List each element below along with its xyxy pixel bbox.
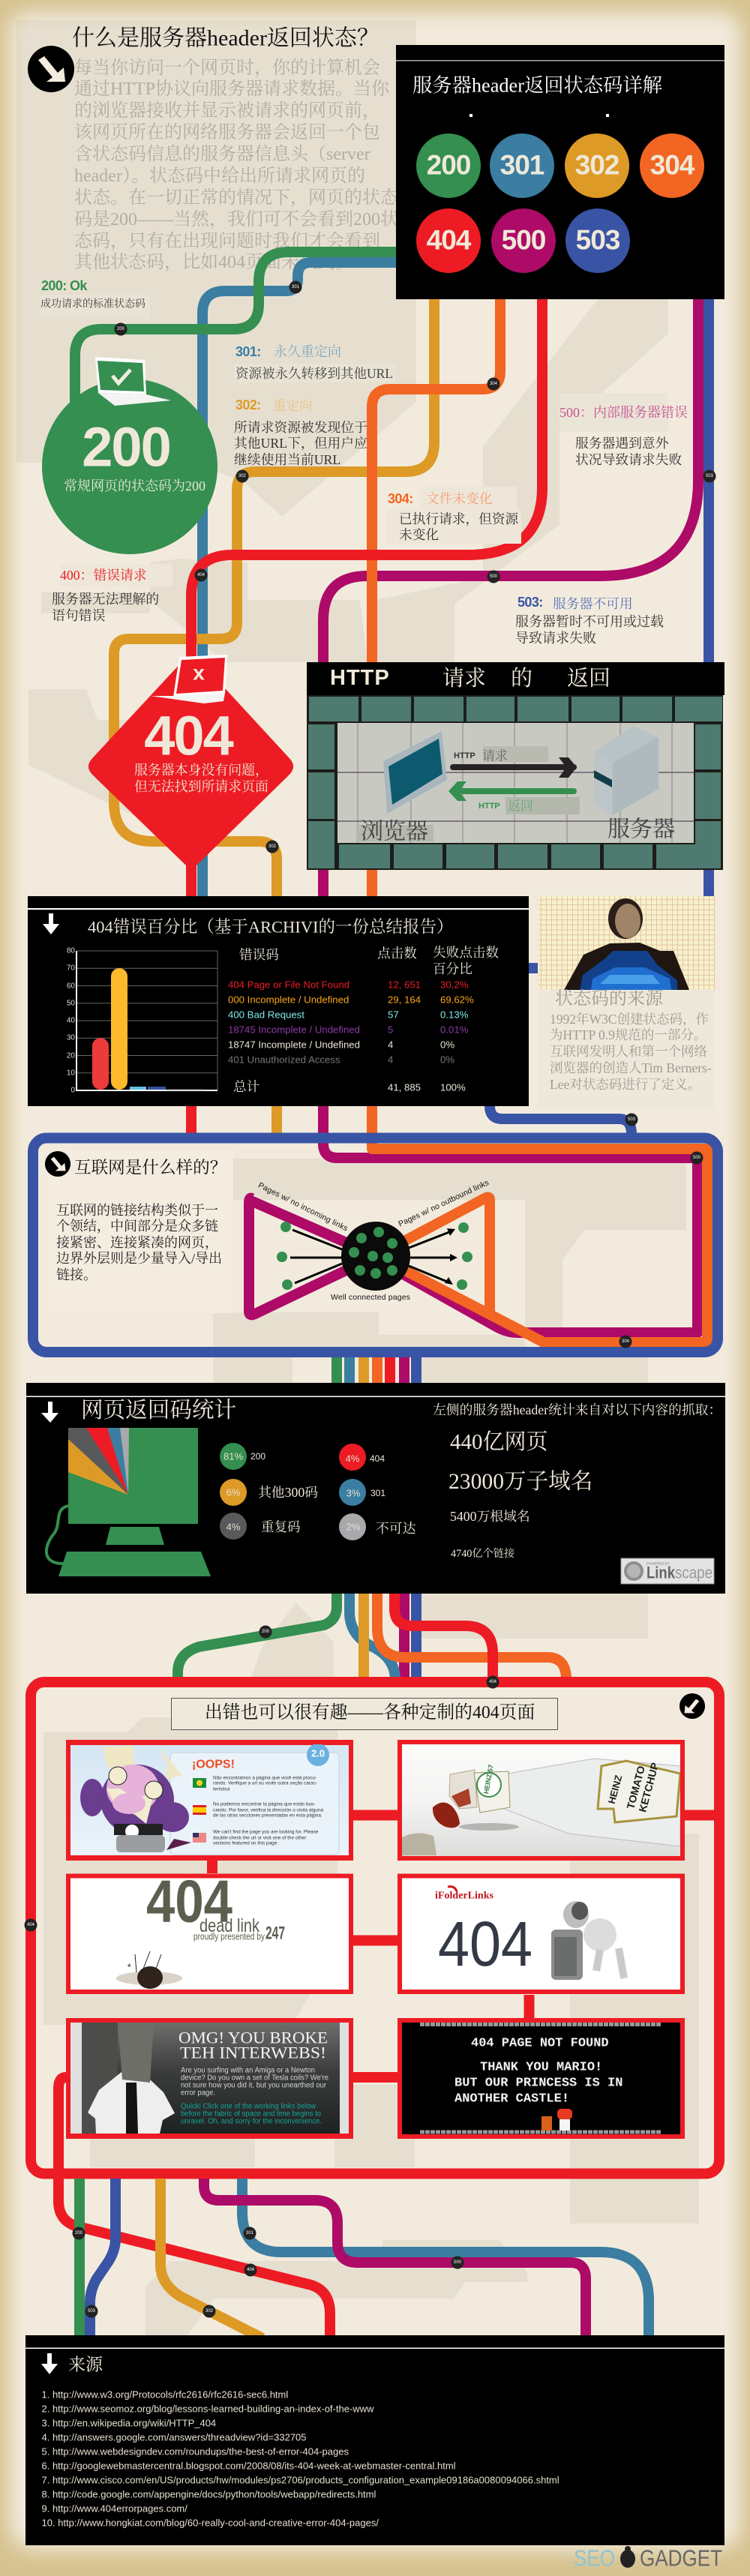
callout: 200 circle bbox=[42, 357, 218, 554]
gallery: mario page: BUT OUR PRINCESS IS IN bbox=[454, 2076, 622, 2091]
subway stations: 503 bbox=[706, 474, 714, 478]
text block: 为HTTP 0.9规范的一部分。 bbox=[550, 1027, 706, 1042]
data table: 4 bbox=[388, 1054, 393, 1065]
panel title: 服务器header返回状态码详解 bbox=[412, 75, 662, 96]
panel: status code list bbox=[396, 45, 724, 299]
text block: intro paragraph bbox=[74, 58, 399, 272]
subway stations: 503 bbox=[628, 1117, 636, 1122]
text block: 浏览器的创造人Tim Berners- bbox=[550, 1060, 712, 1075]
bar chart: 0 bbox=[70, 1086, 75, 1095]
icon: browser monitor bbox=[383, 731, 447, 814]
gallery: broke the interwebs page bbox=[68, 2020, 351, 2137]
heading: 状态码的来源 bbox=[555, 988, 664, 1009]
text block: intro paragraph: 每当你访问一个网页时，你的计算机会 bbox=[74, 58, 380, 78]
source list bbox=[42, 2389, 560, 2529]
data table: 41, 885 bbox=[388, 1081, 421, 1093]
gallery: broke the interwebs page: Are you surfing with an Amiga or a Newton bbox=[181, 2067, 315, 2074]
text: 302 bbox=[234, 397, 368, 467]
text block: 1992年W3C创建状态码，作 bbox=[550, 1012, 709, 1027]
text: 400: 服务器无法理解的 bbox=[52, 592, 159, 607]
data table: 404 Page or File Not Found bbox=[228, 979, 350, 990]
gallery: dead link page: 404 bbox=[146, 1867, 232, 1935]
source list: 6. http://googlewebmastercentral.blogspot.com/2008/08/its-404-week-at-webmaster-central.html bbox=[42, 2460, 456, 2472]
gallery: broke the interwebs page: device? Do you own a set of Tesla coils? We're bbox=[181, 2074, 328, 2082]
bottom stations: 200 bbox=[75, 2231, 83, 2236]
text block: Lee对状态码进行了定义。 bbox=[550, 1077, 700, 1092]
data table: 30.2% bbox=[440, 979, 469, 990]
data table: 错误码 bbox=[239, 947, 279, 962]
status code badges: 404 bbox=[427, 225, 472, 255]
bar chart: 80 bbox=[67, 946, 75, 955]
status code badges: 304 bbox=[650, 150, 695, 180]
arrow: request: 请求 bbox=[482, 748, 508, 763]
crawl numbers: 左侧的服务器header统计来自对以下内容的抓取： bbox=[433, 1402, 722, 1417]
diagram on tile wall bbox=[307, 695, 723, 870]
status code badges: 301 bbox=[500, 150, 544, 180]
icon: laptop error bbox=[151, 655, 227, 703]
gallery: ketchup page: HEINZ 57 bbox=[482, 1764, 495, 1795]
bottom stations: 500 bbox=[454, 2260, 462, 2265]
heading box: 出错也可以很有趣——各种定制的404页面 bbox=[205, 1702, 535, 1723]
panel: http request and response bbox=[307, 662, 724, 870]
legend: 3% bbox=[346, 1488, 361, 1498]
text: 503: 服务器暂时不可用或过载 bbox=[515, 614, 664, 629]
subway stations: 200 bbox=[117, 327, 125, 331]
gallery: monster page: ¡OOPS! bbox=[192, 1758, 235, 1771]
source list: 1. http://www.w3.org/Protocols/rfc2616/rfc2616-sec6.html bbox=[42, 2389, 288, 2400]
text: 304: 已执行请求，但资源 bbox=[399, 511, 519, 526]
text block bbox=[56, 1203, 222, 1282]
text block: 链接。 bbox=[56, 1267, 97, 1282]
icon: arrow circle top bbox=[28, 46, 74, 92]
legend: 4% bbox=[346, 1453, 360, 1464]
source list: 5. http://www.webdesigndev.com/roundups/the-best-of-error-404-pages bbox=[42, 2446, 349, 2457]
icon: arrow circle bbox=[680, 1693, 705, 1719]
text: 302: 继续使用当前URL bbox=[234, 452, 340, 467]
legend: 不可达 bbox=[376, 1521, 416, 1536]
station: 404 bbox=[27, 1923, 35, 1927]
label: server: 服务器 bbox=[608, 817, 675, 841]
portrait bbox=[538, 896, 715, 990]
bar chart: 40 bbox=[67, 1017, 75, 1024]
data table: 12, 651 bbox=[388, 979, 421, 990]
text: 302: 重定向 bbox=[273, 398, 312, 413]
crawl numbers bbox=[433, 1402, 722, 1560]
source list: 8. http://code.google.com/appengine/docs/python/tools/webapp/redirects.html bbox=[42, 2488, 376, 2500]
bow tie diagram: Pages w/ no incoming links bbox=[256, 1181, 350, 1233]
source list: 7. http://www.cisco.com/en/US/products/hw/modules/ps2706/products_configuration_example09186a0080094066.shtml bbox=[42, 2475, 560, 2485]
icon: down arrow bbox=[41, 1402, 58, 1423]
text: 304 bbox=[386, 487, 521, 544]
panel heading: HTTP bbox=[330, 666, 390, 690]
gallery: ifolderlinks page: iFolderLinks bbox=[435, 1890, 494, 1902]
data table: 57 bbox=[388, 1009, 399, 1020]
computer pie chart bbox=[46, 1428, 211, 1576]
crawl numbers: 23000万子域名 bbox=[448, 1469, 592, 1494]
badge: linkscape: scape bbox=[675, 1563, 712, 1582]
subway stations: 301 bbox=[292, 285, 300, 289]
gallery: monster page bbox=[68, 1742, 351, 1858]
data table: 失败点击数 bbox=[433, 945, 499, 960]
station: 200 bbox=[262, 1630, 270, 1634]
panel heading: 的 bbox=[511, 666, 532, 691]
text: 302: 302: bbox=[236, 397, 261, 412]
data table: 4 bbox=[388, 1039, 393, 1050]
gallery: monster page: de las otras secciones presentadas en esta página. bbox=[213, 1813, 322, 1818]
callout: 404 diamond bbox=[90, 654, 292, 868]
callout: 404 diamond: 服务器本身没有问题， bbox=[134, 763, 268, 778]
text block: intro paragraph: 通过HTTP协议向服务器请求数据。当你 bbox=[74, 79, 390, 99]
text block: intro paragraph: 状态。在一切正常的情况下，网页的状态 bbox=[74, 187, 399, 208]
bar chart bbox=[67, 946, 218, 1095]
gallery: mario page: THANK YOU MARIO! bbox=[480, 2061, 602, 2074]
text: 500 bbox=[560, 393, 688, 467]
panel title: 网页返回码统计 bbox=[81, 1398, 236, 1423]
text: 500: 500：内部服务器错误 bbox=[560, 405, 688, 420]
gallery: dead link page: dead link bbox=[200, 1915, 260, 1936]
subway stations: 500 bbox=[693, 1156, 701, 1160]
arrow: request: HTTP bbox=[454, 751, 476, 760]
data table: 百分比 bbox=[433, 961, 472, 976]
gallery: monster page: We can't find the page you are looking for. Please bbox=[213, 1830, 319, 1834]
arrow: response bbox=[448, 781, 580, 814]
gallery: ifolderlinks page: 404 bbox=[438, 1909, 532, 1979]
bottom stations bbox=[72, 2227, 464, 2317]
subway stations: 500 bbox=[490, 574, 498, 579]
subway lines: upper section bbox=[75, 252, 709, 1140]
panel: sources bbox=[26, 2335, 724, 2545]
data table: 000 Incomplete / Undefined bbox=[228, 994, 349, 1005]
gallery: broke the interwebs page: before the fabric of space and time begins to bbox=[181, 2110, 321, 2118]
frame: internet panel bbox=[33, 1138, 718, 1352]
gallery: dead link page: proudly presented by bbox=[194, 1930, 265, 1942]
heading: 来源 bbox=[68, 2355, 104, 2374]
bar chart: 70 bbox=[67, 964, 75, 972]
badge: linkscape: POWERED BY bbox=[646, 1561, 670, 1566]
bow tie diagram: Pages w/ no outbound links bbox=[397, 1178, 490, 1228]
bottom stations: 404 bbox=[247, 2268, 255, 2272]
status code badges: 302 bbox=[575, 150, 620, 180]
gallery: broke the interwebs page: not sure how you did it, but you unearthed our bbox=[181, 2082, 327, 2089]
gallery: monster page: Não encontramos a página que você está procu- bbox=[213, 1776, 316, 1780]
gallery: ifolderlinks page bbox=[400, 1876, 682, 1992]
text: 301: 301: bbox=[236, 344, 261, 359]
data table: 0% bbox=[440, 1039, 454, 1050]
icon: down arrow bbox=[41, 2353, 58, 2374]
gallery: monster page: sections featured on this page. bbox=[213, 1840, 278, 1846]
panel title: 404错误百分比（基于ARCHIVI的一份总结报告） bbox=[88, 918, 453, 936]
icon: laptop error: x bbox=[193, 661, 205, 684]
frame: custom 404 pages bbox=[31, 1682, 719, 2335]
data table: 总计 bbox=[233, 1079, 260, 1094]
callout: 200 circle: 200 bbox=[82, 415, 170, 478]
heading: what is the server header status: 什么是服务器header返回状态？ bbox=[72, 25, 380, 51]
text: 500: 状况导致请求失败 bbox=[575, 452, 682, 467]
crawl numbers: 440亿网页 bbox=[450, 1429, 548, 1454]
icon: down arrow bbox=[43, 913, 59, 934]
gallery: broke the interwebs page: Quick! Click one of the working links below bbox=[181, 2103, 316, 2110]
subway lines: bottom section bbox=[80, 2179, 649, 2338]
gallery: mario page bbox=[400, 2020, 682, 2137]
status code badges: 200 bbox=[427, 150, 471, 180]
source list: 2. http://www.seomoz.org/blog/lessons-learned-building-an-index-of-the-www bbox=[42, 2403, 374, 2415]
subway stations: 404 bbox=[197, 573, 206, 577]
data table: 69.62% bbox=[440, 994, 474, 1005]
text: 200 ok bbox=[40, 278, 150, 319]
text: 200 ok: 200: Ok bbox=[41, 278, 88, 293]
gallery: dead link page: 247 bbox=[266, 1923, 285, 1944]
gallery: dead link page: * bbox=[128, 1962, 131, 1972]
legend: 重复码 bbox=[261, 1519, 300, 1534]
data table: 29, 164 bbox=[388, 994, 421, 1005]
bottom stations: 302 bbox=[206, 2309, 214, 2314]
bow tie diagram bbox=[256, 1178, 490, 1302]
logo: seo gadget: GADGET bbox=[640, 2545, 722, 2571]
callout: 404 diamond: 但无法找到所请求页面 bbox=[134, 779, 268, 794]
text: 503: 导致请求失败 bbox=[515, 631, 596, 646]
station: 404 bbox=[489, 1680, 497, 1684]
text: 304: 304: bbox=[388, 491, 413, 506]
badge: linkscape bbox=[621, 1558, 714, 1584]
gallery: monster page: terística bbox=[213, 1786, 230, 1792]
gallery: mario page: 404 PAGE NOT FOUND bbox=[471, 2037, 609, 2050]
bar chart: 30 bbox=[67, 1033, 75, 1042]
data table: 点击数 bbox=[377, 946, 417, 961]
text: 200 ok: 成功请求的标准状态码 bbox=[40, 297, 146, 310]
text: 301: 资源被永久转移到其他URL bbox=[236, 366, 393, 381]
callout: 404 diamond: 404 bbox=[144, 705, 234, 766]
source list: 3. http://en.wikipedia.org/wiki/HTTP_404 bbox=[42, 2418, 216, 2428]
gallery: mario page: ANOTHER CASTLE! bbox=[454, 2092, 569, 2106]
gallery: broke the interwebs page: unravel. Oh, and sorry for the inconvenience. bbox=[181, 2118, 322, 2125]
text: 400: 400：错误请求 bbox=[60, 568, 147, 583]
gallery: broke the interwebs page: OMG! YOU BROKE bbox=[178, 2028, 328, 2047]
gallery: monster page: No podemos encontrar la página que estás bus- bbox=[213, 1801, 315, 1807]
panel: 404 error percentage bbox=[28, 896, 529, 1106]
crawl numbers: 4740亿个链接 bbox=[451, 1547, 515, 1560]
panel: origin of status codes bbox=[538, 896, 715, 1108]
data table: 401 Unauthorized Access bbox=[228, 1054, 340, 1065]
legend: 4% bbox=[226, 1521, 241, 1533]
text block bbox=[550, 1012, 712, 1092]
station bbox=[260, 1626, 272, 1638]
data table: 18745 Incomplete / Undefined bbox=[228, 1024, 360, 1035]
data table: 400 Bad Request bbox=[228, 1009, 304, 1020]
status code badges bbox=[416, 114, 704, 273]
text block: 个领结，中间部分是众多链 bbox=[56, 1219, 218, 1234]
panel heading bbox=[330, 666, 610, 691]
subway stations: 304 bbox=[490, 382, 498, 386]
legend: 200 bbox=[250, 1451, 266, 1462]
callout: 200 circle: 常规网页的状态码为200 bbox=[64, 478, 206, 493]
subway stations: 302 bbox=[238, 474, 247, 478]
legend: 6% bbox=[226, 1486, 241, 1498]
icon: server bbox=[594, 726, 658, 815]
data table: 100% bbox=[440, 1081, 466, 1093]
gallery: broke the interwebs page: error page. bbox=[181, 2089, 215, 2097]
text: 503: 503: bbox=[518, 595, 543, 610]
subway stations: 304 bbox=[622, 1339, 630, 1344]
gallery: dead link page bbox=[68, 1867, 351, 1992]
station bbox=[486, 1675, 500, 1689]
text block: intro paragraph: 含状态码信息的服务器信息头（server bbox=[74, 144, 370, 164]
arrow: request bbox=[453, 746, 577, 778]
gallery: ketchup page: HEINZ bbox=[606, 1774, 624, 1805]
bow tie diagram: Well connected pages bbox=[331, 1293, 410, 1302]
text block: 接紧密、连接紧凑的网页， bbox=[56, 1235, 218, 1250]
subway stations bbox=[114, 280, 716, 1348]
data table: 0.13% bbox=[440, 1009, 469, 1020]
subway lines: internet section bbox=[249, 1129, 707, 1342]
text block: intro paragraph: 该网页所在的网络服务器会返回一个包 bbox=[74, 122, 380, 142]
text: 301 bbox=[234, 344, 395, 382]
gallery: monster page: cando. Por favor, verifica la dirección o visita alguna bbox=[213, 1807, 324, 1813]
bottom stations: 301 bbox=[246, 2231, 254, 2236]
bar chart: 10 bbox=[67, 1069, 75, 1077]
badge: linkscape: Link bbox=[646, 1563, 676, 1582]
subway lines: connector to stats bbox=[337, 1357, 416, 1383]
text: 302: 所请求资源被发现位于 bbox=[234, 420, 368, 435]
text: 302: 其他URL下，但用户应 bbox=[234, 436, 368, 451]
station bbox=[24, 1918, 38, 1932]
panel heading: 返回 bbox=[567, 667, 610, 691]
logo: seo gadget: SEO bbox=[574, 2545, 615, 2571]
text block: 互联网发明人和第一个网络 bbox=[550, 1044, 707, 1059]
text block: 边界外层则是少量导入/导出 bbox=[56, 1251, 222, 1266]
text: 301: 永久重定向 bbox=[274, 344, 341, 359]
data table: 0.01% bbox=[440, 1024, 469, 1035]
text block: intro paragraph: 的浏览器接收并显示被请求的网页前， bbox=[74, 100, 380, 121]
gallery: ketchup page: TOMATO bbox=[624, 1765, 647, 1810]
bar chart: 50 bbox=[67, 999, 75, 1008]
logo: seo gadget bbox=[574, 2545, 722, 2571]
text block: intro paragraph: 码是200——当然，我们可不会看到200状 bbox=[74, 209, 398, 229]
bottom stations: 503 bbox=[88, 2309, 96, 2314]
text block: intro paragraph: 其他状态码，比如404页面未找到。 bbox=[74, 252, 353, 272]
bar chart: 20 bbox=[67, 1051, 75, 1060]
text: 304: 文件未变化 bbox=[426, 491, 493, 506]
source list: 4. http://answers.google.com/answers/threadview?id=332705 bbox=[42, 2431, 307, 2443]
subway lines: stats to custom pages bbox=[178, 1594, 566, 1680]
data table bbox=[228, 945, 499, 1094]
text block: intro paragraph: header）。状态码中给出所请求网页的 bbox=[74, 166, 365, 186]
legend: 其他300码 bbox=[258, 1485, 318, 1500]
legend: 81% bbox=[224, 1450, 243, 1462]
gallery: ketchup page bbox=[400, 1742, 682, 1858]
text: 503: 服务器不可用 bbox=[553, 596, 633, 611]
legend bbox=[220, 1443, 416, 1540]
gallery: monster page: double-check the url or visit one of the other bbox=[213, 1836, 307, 1840]
gallery: monster page: rando. Verifique a url ou visite outra seção carac- bbox=[213, 1780, 317, 1786]
icon: laptop ok bbox=[95, 357, 171, 406]
text: 304: 未变化 bbox=[399, 527, 439, 542]
arrow: response: HTTP bbox=[478, 802, 500, 811]
data table: 0% bbox=[440, 1054, 454, 1065]
text block: 互联网的链接结构类似于一 bbox=[56, 1203, 218, 1218]
text panel: what the internet looks like bbox=[45, 1151, 233, 1313]
crawl numbers: 5400万根域名 bbox=[450, 1508, 530, 1524]
heading: 互联网是什么样的？ bbox=[74, 1158, 226, 1177]
panel: response code statistics bbox=[26, 1383, 725, 1594]
text: 503 bbox=[515, 595, 664, 646]
panel heading: 请求 bbox=[442, 666, 486, 691]
icon: arrow circle bbox=[45, 1151, 70, 1177]
status code badges: 503 bbox=[576, 225, 620, 255]
arrow: response: 返回 bbox=[508, 799, 533, 813]
legend: 301 bbox=[370, 1488, 386, 1498]
text: 400 bbox=[41, 564, 172, 623]
gallery: broke the interwebs page: TEH INTERWEBS! bbox=[180, 2043, 326, 2062]
label: browser: 浏览器 bbox=[361, 819, 428, 844]
text block: intro paragraph: 态码，只有在出现问题时我们才会看到 bbox=[74, 231, 380, 251]
text: 400: 语句错误 bbox=[52, 608, 106, 623]
gallery: monster page: 2.0 bbox=[311, 1747, 325, 1759]
subway stations: 302 bbox=[268, 844, 277, 849]
text: 500: 服务器遇到意外 bbox=[575, 436, 670, 451]
heading box bbox=[171, 1698, 558, 1729]
source list: 9. http://www.404errorpages.com/ bbox=[42, 2503, 188, 2514]
source list: 10. http://www.hongkiat.com/blog/60-really-cool-and-creative-error-404-pages/ bbox=[42, 2517, 379, 2529]
status code badges: 500 bbox=[502, 225, 546, 255]
bar chart: 60 bbox=[67, 982, 75, 990]
gallery: ketchup page: KETCHUP bbox=[636, 1762, 661, 1813]
legend: 404 bbox=[370, 1453, 385, 1464]
legend: 2% bbox=[346, 1521, 361, 1533]
data table: 18747 Incomplete / Undefined bbox=[228, 1039, 360, 1050]
data table: 5 bbox=[388, 1024, 393, 1035]
